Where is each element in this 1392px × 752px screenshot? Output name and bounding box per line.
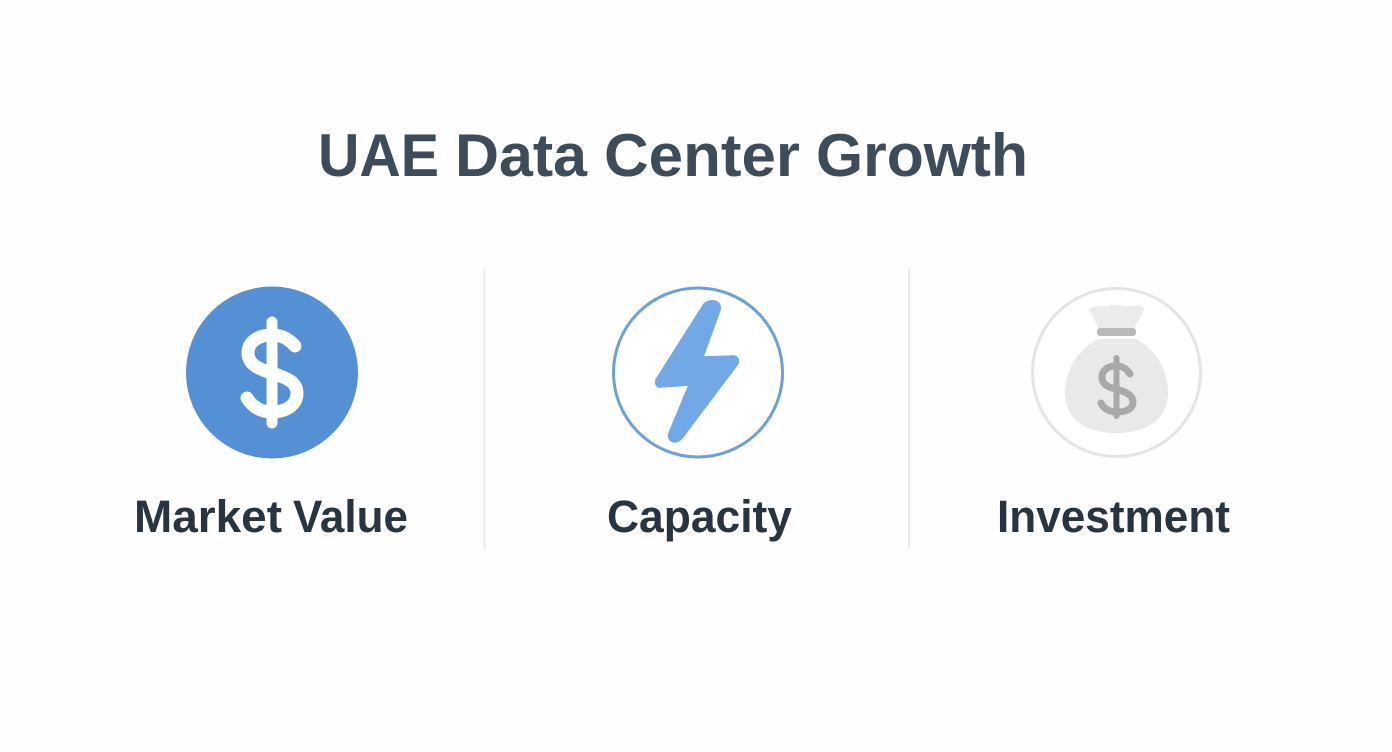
panel: investment — [997, 288, 1230, 542]
title: Growth — [816, 122, 1028, 189]
label: market value — [134, 491, 408, 542]
icon: dollar coin — [186, 286, 358, 458]
icon: money bag — [1032, 288, 1200, 456]
icon: lightning bolt — [614, 288, 782, 457]
title — [318, 122, 1028, 189]
label: capacity: Capacity — [607, 491, 792, 542]
title: UAE — [318, 122, 439, 189]
title: Data — [455, 122, 588, 189]
label: market value: Value — [293, 491, 408, 542]
panel: market value — [134, 286, 408, 542]
label: investment: Investment — [997, 491, 1230, 542]
title: Center — [604, 122, 800, 189]
panel: capacity — [607, 288, 792, 542]
label: market value: Market — [134, 491, 282, 542]
